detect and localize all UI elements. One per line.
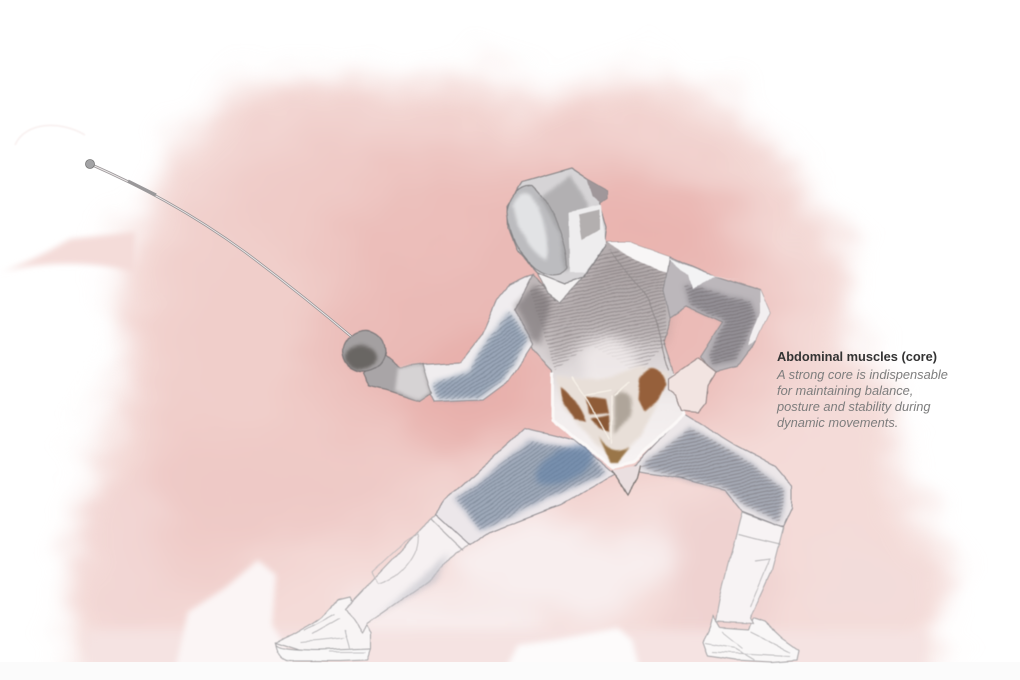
- bottom strip: [0, 662, 1020, 680]
- jacket body: [515, 243, 690, 468]
- sword arm sleeve: [423, 274, 552, 402]
- front sock: [716, 512, 783, 624]
- back shoe: [275, 597, 371, 661]
- abdominal muscles: [552, 366, 684, 467]
- foil blade: [86, 160, 353, 338]
- hand on hip: [668, 358, 716, 412]
- front shoe: [703, 616, 799, 662]
- callout body: dynamic movements.: [777, 415, 898, 430]
- groin flap: [612, 465, 640, 494]
- glove and guard: [337, 325, 432, 401]
- mask bib: [537, 232, 605, 302]
- callout heading: Abdominal muscles (core): [777, 349, 937, 364]
- back sock: [346, 513, 470, 632]
- callout body: A strong core is indispensable: [776, 367, 948, 382]
- front thigh: [630, 414, 792, 527]
- rear arm sleeve: [664, 257, 770, 373]
- callout: abdominal muscles: [776, 349, 948, 430]
- callout body: posture and stability during: [776, 399, 931, 414]
- fencing mask: [507, 168, 608, 283]
- callout body: for maintaining balance,: [777, 383, 913, 398]
- back thigh: [436, 428, 615, 545]
- fencer figure: [275, 168, 799, 662]
